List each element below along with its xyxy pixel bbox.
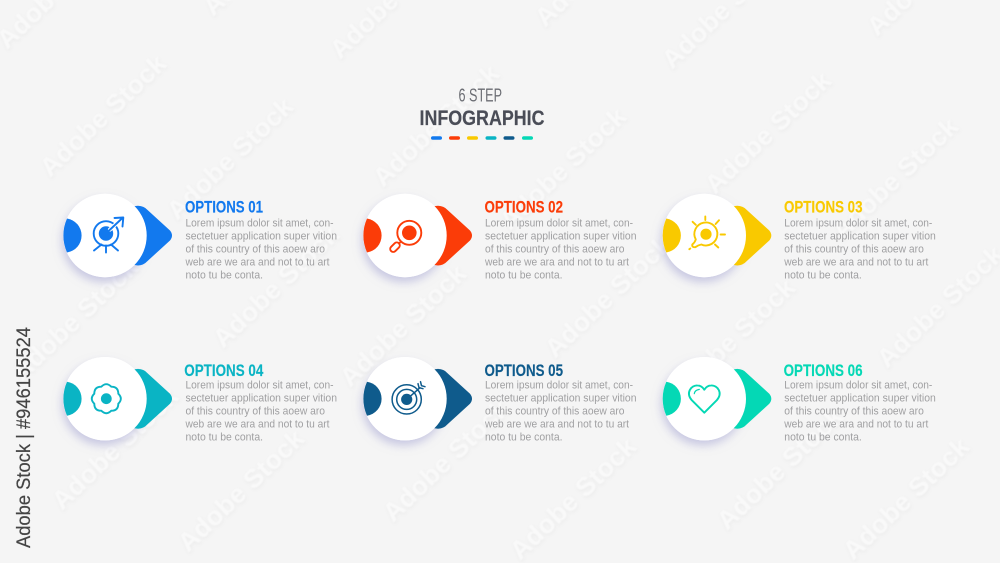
body text: web are we ara and not to tu art bbox=[783, 256, 929, 268]
body text bbox=[783, 218, 936, 282]
text: Adobe Stock bbox=[206, 219, 345, 353]
body text: noto tu be conta. bbox=[186, 270, 263, 282]
arrow bbox=[431, 369, 472, 429]
body text: sectetuer application super vition bbox=[485, 393, 636, 405]
body text: sectetuer application super vition bbox=[186, 230, 337, 242]
text: Adobe Stock bbox=[698, 65, 837, 199]
body text: Lorem ipsum dolor sit amet, con- bbox=[485, 380, 633, 392]
body text: noto tu be conta. bbox=[485, 270, 562, 282]
body text: noto tu be conta. bbox=[784, 270, 862, 282]
panel: options 01 bbox=[63, 194, 337, 282]
stock credit: Adobe Stock | #946155524 bbox=[13, 327, 35, 548]
heading: OPTIONS 01 bbox=[185, 198, 263, 217]
icon: light bulb bbox=[689, 216, 725, 249]
text: Adobe Stock bbox=[836, 431, 975, 563]
body text: sectetuer application super vition bbox=[784, 230, 936, 242]
body text: web are we ara and not to tu art bbox=[484, 256, 630, 268]
arrow bbox=[131, 369, 172, 429]
text: Adobe Stock bbox=[503, 431, 642, 563]
body text: web are we ara and not to tu art bbox=[185, 256, 330, 268]
title bbox=[420, 84, 544, 130]
body text: of this country of this aoew aro bbox=[485, 244, 624, 256]
text: Adobe Stock bbox=[538, 229, 677, 363]
title line: 6 step: 6 STEP bbox=[458, 84, 502, 106]
panel: options 03 bbox=[663, 194, 936, 282]
half disc bbox=[363, 382, 382, 416]
body text: Lorem ipsum dolor sit amet, con- bbox=[485, 218, 633, 230]
body text: noto tu be conta. bbox=[784, 432, 862, 444]
colour dashes bbox=[431, 136, 533, 140]
text: Adobe Stock bbox=[160, 91, 299, 225]
body text: web are we ara and not to tu art bbox=[185, 419, 330, 431]
circle bbox=[63, 194, 147, 277]
body text bbox=[484, 380, 636, 444]
body text: web are we ara and not to tu art bbox=[484, 419, 630, 431]
text: Adobe Stock bbox=[366, 58, 505, 192]
icon: bullseye with dart bbox=[392, 382, 425, 414]
icon: target with arrow bbox=[94, 218, 123, 252]
arrow bbox=[730, 369, 771, 429]
circle bbox=[363, 357, 447, 440]
circle bbox=[63, 357, 147, 440]
body text: of this country of this aoew aro bbox=[784, 244, 924, 256]
body text bbox=[185, 380, 337, 444]
half disc bbox=[63, 382, 82, 416]
body text bbox=[484, 218, 636, 282]
body text: of this country of this aoew aro bbox=[485, 406, 624, 418]
text: Adobe Stock bbox=[710, 401, 849, 535]
arrow bbox=[431, 206, 472, 266]
heading: OPTIONS 02 bbox=[484, 198, 563, 217]
text: Adobe Stock bbox=[376, 393, 515, 527]
body text bbox=[783, 380, 936, 444]
icon: magnifier bbox=[389, 221, 421, 253]
text: Adobe Stock bbox=[662, 272, 801, 406]
heading: OPTIONS 04 bbox=[184, 361, 264, 380]
body text: Lorem ipsum dolor sit amet, con- bbox=[784, 380, 933, 392]
heading: OPTIONS 03 bbox=[784, 198, 862, 217]
text: Adobe Stock bbox=[171, 423, 310, 557]
icon: heart bbox=[689, 385, 720, 413]
heading: OPTIONS 05 bbox=[484, 361, 563, 380]
title line: infographic: INFOGRAPHIC bbox=[420, 107, 544, 130]
body text: Lorem ipsum dolor sit amet, con- bbox=[186, 218, 334, 230]
panel: options 05 bbox=[363, 357, 636, 444]
text: Adobe Stock bbox=[493, 101, 632, 235]
text: Adobe Stock bbox=[33, 48, 172, 182]
text: Adobe Stock bbox=[333, 258, 472, 392]
circle bbox=[663, 194, 746, 277]
body text: sectetuer application super vition bbox=[784, 393, 936, 405]
half disc bbox=[363, 218, 382, 252]
body text: noto tu be conta. bbox=[186, 432, 263, 444]
panel: options 04 bbox=[63, 357, 337, 444]
half disc bbox=[663, 218, 681, 252]
heading: OPTIONS 06 bbox=[784, 361, 863, 380]
circle bbox=[363, 194, 447, 277]
icon: flower gear bbox=[92, 384, 121, 413]
circle bbox=[663, 357, 746, 440]
body text: sectetuer application super vition bbox=[485, 230, 636, 242]
body text: of this country of this aoew aro bbox=[784, 406, 924, 418]
body text: Lorem ipsum dolor sit amet, con- bbox=[186, 380, 334, 392]
body text: of this country of this aoew aro bbox=[186, 244, 325, 256]
text: Adobe Stock bbox=[825, 111, 964, 245]
half disc bbox=[63, 218, 82, 252]
arrow bbox=[730, 206, 771, 266]
arrow bbox=[131, 206, 172, 266]
half disc bbox=[663, 382, 681, 416]
body text: noto tu be conta. bbox=[485, 432, 562, 444]
body text: of this country of this aoew aro bbox=[186, 406, 325, 418]
body text: Lorem ipsum dolor sit amet, con- bbox=[784, 218, 933, 230]
panel: options 06 bbox=[663, 357, 936, 444]
body text: web are we ara and not to tu art bbox=[783, 419, 929, 431]
text: Adobe Stock bbox=[45, 381, 184, 515]
panel: options 02 bbox=[363, 194, 636, 282]
body text: sectetuer application super vition bbox=[186, 393, 337, 405]
body text bbox=[185, 218, 337, 282]
text: Adobe Stock bbox=[5, 252, 144, 386]
